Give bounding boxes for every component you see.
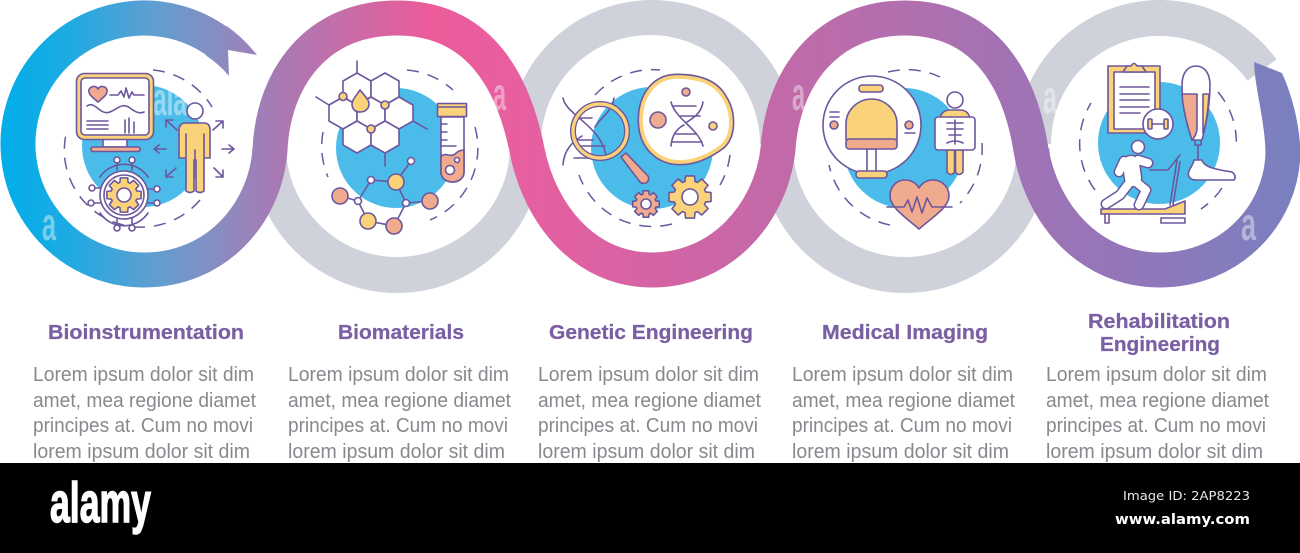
column 4 text: amet, mea regione diamet <box>792 390 1015 412</box>
gradient ribbon <box>18 18 1300 270</box>
column 5 text: amet, mea regione diamet <box>1046 390 1269 412</box>
column 1 text: principes at. Cum no movi <box>33 415 253 437</box>
column 5 text <box>1046 364 1269 463</box>
icon: genetic engineering <box>563 70 731 227</box>
column 5 text: principes at. Cum no movi <box>1046 415 1266 437</box>
watermark letters <box>42 68 1256 250</box>
icon: runner on treadmill <box>1101 140 1185 223</box>
column 2 text: lorem ipsum dolor sit dim <box>288 441 505 463</box>
icon: person <box>179 103 210 192</box>
ribbon tail end <box>1254 62 1300 154</box>
arrow head <box>206 26 257 76</box>
icon: dna strand <box>563 98 614 165</box>
website: www.alamy.com <box>1115 512 1250 528</box>
column 1 text <box>33 364 256 463</box>
column 3 text: amet, mea regione diamet <box>538 390 761 412</box>
column 2 heading: Biomaterials <box>338 322 464 344</box>
icon: molecule <box>332 158 438 234</box>
column 2 text: amet, mea regione diamet <box>288 390 511 412</box>
icon: arrows <box>154 120 234 177</box>
icon: medical imaging <box>823 70 982 229</box>
alamy logo: alamy <box>50 471 151 535</box>
column 1 text: Lorem ipsum dolor sit dim <box>33 364 254 386</box>
column 5 heading: Engineering <box>1100 334 1220 356</box>
icon: bioinstrumentation <box>64 70 234 231</box>
column 1 text: amet, mea regione diamet <box>33 390 256 412</box>
icon: x-ray person <box>935 92 975 174</box>
column 5 text: Lorem ipsum dolor sit dim <box>1046 364 1267 386</box>
icon: biomaterials <box>316 61 478 234</box>
icon: monitor <box>76 74 154 152</box>
icon: magnifying glass <box>573 104 649 183</box>
icon: clipboard <box>1108 64 1160 133</box>
column 4 text: Lorem ipsum dolor sit dim <box>792 364 1013 386</box>
watermark on blue disc: ala <box>153 73 187 125</box>
icon: test tube <box>438 104 466 182</box>
column 2 text: Lorem ipsum dolor sit dim <box>288 364 509 386</box>
column 1 heading: Bioinstrumentation <box>48 322 244 344</box>
icon: gear circuit <box>88 157 160 231</box>
column 2 text <box>288 364 511 463</box>
column 1 text: lorem ipsum dolor sit dim <box>33 441 250 463</box>
watermark letters: a <box>1241 198 1256 250</box>
column 4 text: principes at. Cum no movi <box>792 415 1012 437</box>
column 3 text: Lorem ipsum dolor sit dim <box>538 364 759 386</box>
column 4 heading: Medical Imaging <box>822 322 988 344</box>
column 3 heading: Genetic Engineering <box>549 322 753 344</box>
icon: hexagon lattice <box>316 61 427 166</box>
watermark letters: a <box>493 68 506 120</box>
icon: prosthetic leg <box>1182 66 1235 180</box>
watermark letters: a <box>1043 71 1057 123</box>
image id: Image ID: 2AP8223 <box>1123 488 1250 503</box>
column 4 text: lorem ipsum dolor sit dim <box>792 441 1009 463</box>
column 5 heading: Rehabilitation <box>1088 311 1230 333</box>
watermark letters: a <box>792 68 805 120</box>
icon: heart with pulse <box>887 180 952 229</box>
icon: gears <box>633 176 711 218</box>
icon: mri scanner <box>823 76 921 178</box>
footer band <box>0 463 1300 553</box>
icon: rehabilitation engineering <box>1080 64 1236 223</box>
column 5 heading <box>1088 311 1230 356</box>
grey ribbon arcs <box>270 18 1262 275</box>
watermark letters: a <box>42 198 56 250</box>
white discs <box>36 35 1267 256</box>
column 3 text: lorem ipsum dolor sit dim <box>538 441 755 463</box>
column 3 text <box>538 364 761 463</box>
column 3 text: principes at. Cum no movi <box>538 415 758 437</box>
column 2 text: principes at. Cum no movi <box>288 415 508 437</box>
icon: dumbbell <box>1143 109 1173 139</box>
column 5 text: lorem ipsum dolor sit dim <box>1046 441 1263 463</box>
column 4 text <box>792 364 1015 463</box>
icon: cell with dna <box>641 77 731 162</box>
